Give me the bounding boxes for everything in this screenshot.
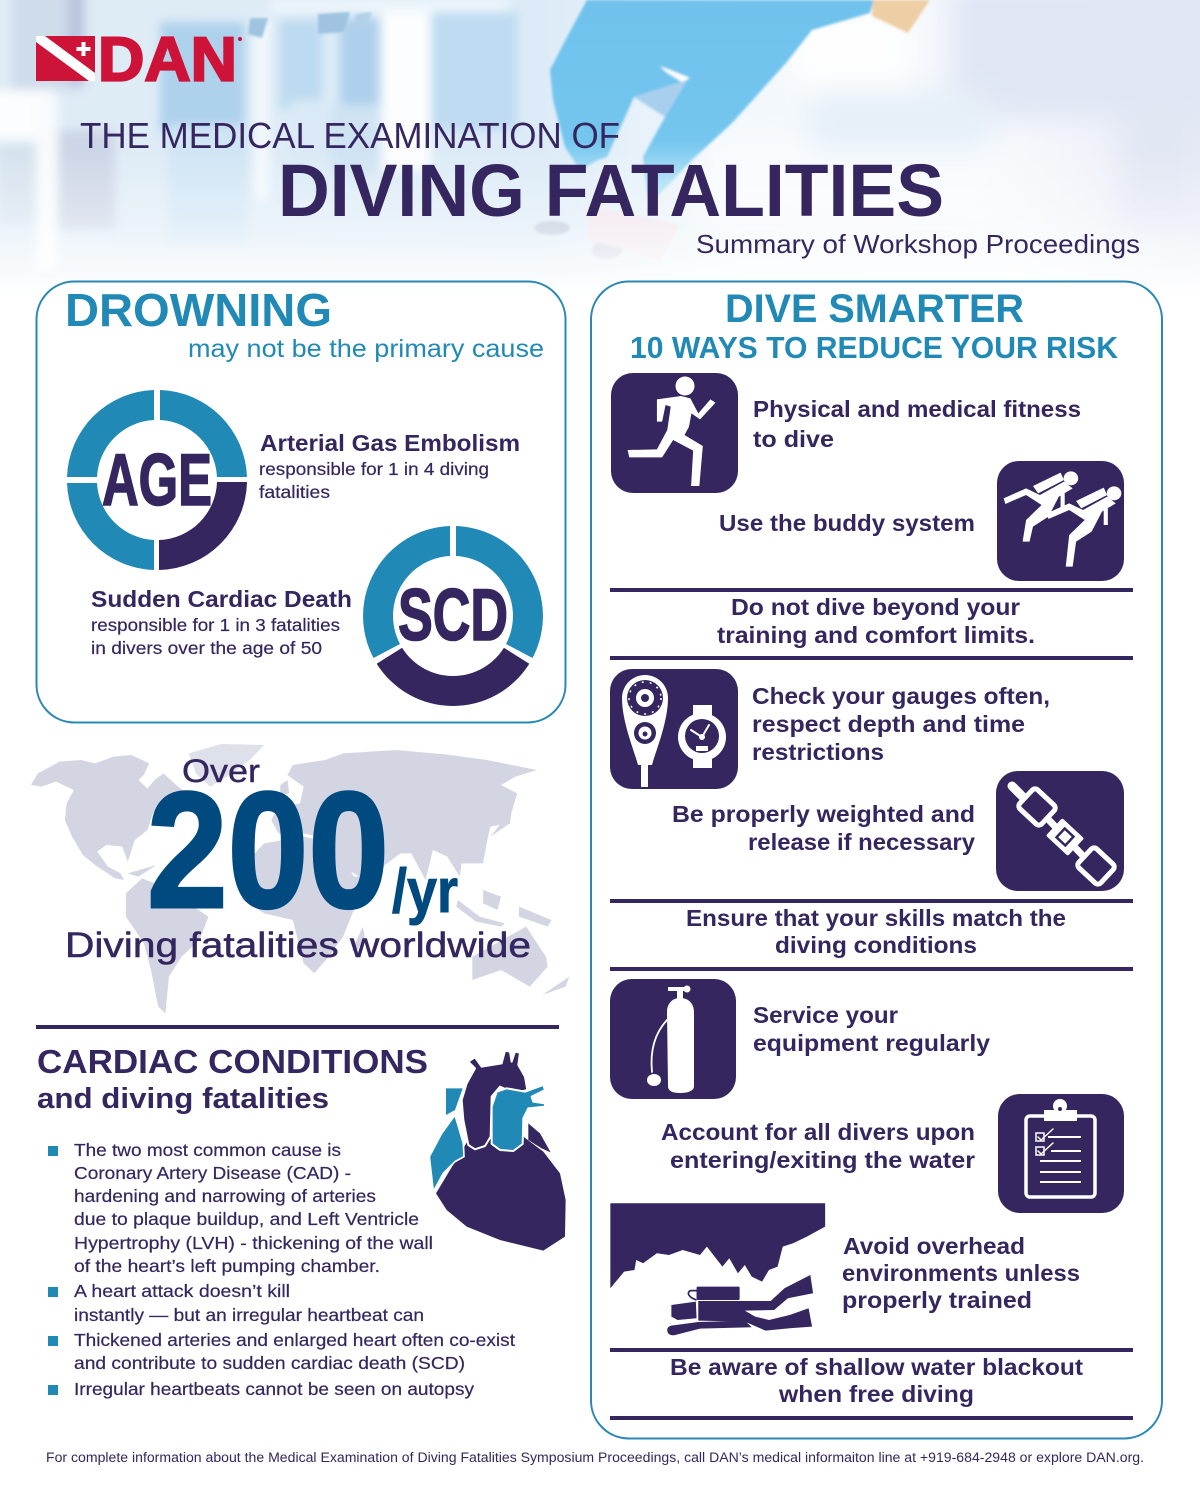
- text: fitness: to dive: [753, 426, 834, 452]
- icon: clipboard: [998, 1094, 1124, 1213]
- list: cardiac facts: hardening and narrowing of arteries: [74, 1186, 376, 1206]
- text: shallow water blackout: Be aware of shallow water blackout: [670, 1354, 1083, 1380]
- text: skills: Ensure that your skills match the: [686, 905, 1066, 931]
- icon: gauges: [610, 669, 738, 789]
- text: equipment: equipment regularly: [753, 1030, 990, 1056]
- text: equipment: [753, 1002, 990, 1056]
- text: equipment: Service your: [753, 1002, 898, 1028]
- title: [80, 115, 1140, 259]
- panel: dive smarter: [591, 282, 1162, 1438]
- heading: drowning: [65, 284, 544, 363]
- text: buddy system: Use the buddy system: [719, 510, 975, 536]
- statistic: over 200 per year: [65, 753, 531, 965]
- heading: dive smarter: DIVE SMARTER: [725, 287, 1024, 331]
- heading: cardiac conditions: CARDIAC CONDITIONS: [37, 1043, 428, 1080]
- text: account for divers: [661, 1119, 975, 1173]
- text: sudden cardiac death: in divers over the age of 50: [91, 638, 322, 658]
- icon: runner: [611, 373, 738, 493]
- heading: cardiac conditions: and diving fatalities: [37, 1083, 329, 1115]
- list: cardiac facts: instantly — but an irregular heartbeat can: [74, 1305, 424, 1325]
- text: fitness: [753, 396, 1081, 452]
- vials: [534, 205, 680, 260]
- world map: [31, 744, 569, 1013]
- text: gauges: restrictions: [752, 739, 884, 765]
- icon: cave diver: [610, 1203, 825, 1335]
- list: cardiac facts: The two most common cause is: [74, 1140, 341, 1160]
- heading: cardiac conditions: [37, 1043, 428, 1115]
- text: gauges: [752, 683, 1050, 765]
- text: skills: [686, 905, 1066, 958]
- icon: blue glove: [550, 0, 930, 200]
- icon: heart: [429, 1051, 566, 1251]
- text: fitness: Physical and medical fitness: [753, 396, 1081, 422]
- chart: SCD donut: SCD: [398, 575, 508, 656]
- text: training limits: training and comfort limits.: [717, 622, 1035, 648]
- text: overhead environments: properly trained: [842, 1287, 1032, 1313]
- title: Summary of Workshop Proceedings: [696, 229, 1140, 259]
- text: skills: diving conditions: [775, 932, 977, 958]
- list: cardiac facts: Hypertrophy (LVH) - thickening of the wall: [74, 1233, 433, 1253]
- icon: two divers: [997, 461, 1124, 581]
- text: weights: release if necessary: [748, 829, 975, 855]
- chart: SCD donut: [363, 526, 543, 706]
- logo: DAN: [36, 26, 242, 94]
- icon: scuba tank: [610, 979, 736, 1099]
- heading: drowning: DROWNING: [65, 284, 332, 336]
- text: arterial gas embolism: fatalities: [259, 482, 330, 502]
- chart: AGE donut: [67, 390, 247, 570]
- heading: drowning: may not be the primary cause: [188, 335, 544, 363]
- statistic: over 200 per year: 200: [147, 758, 389, 942]
- list: cardiac facts: A heart attack doesn’t kill: [74, 1281, 290, 1301]
- title: THE MEDICAL EXAMINATION OF: [80, 115, 620, 156]
- background: blurred laboratory photo: [0, 0, 1200, 300]
- logo: DAN: DAN: [98, 26, 237, 94]
- text: account for divers: entering/exiting the water: [670, 1147, 975, 1173]
- text: overhead environments: environments unless: [842, 1260, 1080, 1286]
- text: gauges: respect depth and time: [752, 711, 1025, 737]
- heading: dive smarter: 10 WAYS TO REDUCE YOUR RISK: [630, 330, 1119, 365]
- text: training limits: [717, 594, 1035, 648]
- text: shallow water blackout: [670, 1354, 1083, 1407]
- list: cardiac facts: Irregular heartbeats cannot be seen on autopsy: [74, 1379, 474, 1399]
- statistic: over 200 per year: Diving fatalities worldwide: [65, 926, 531, 965]
- text: sudden cardiac death: Sudden Cardiac Death: [91, 586, 352, 612]
- list: cardiac facts: due to plaque buildup, and Left Ventricle: [74, 1209, 419, 1229]
- title: DIVING FATALITIES: [278, 149, 944, 232]
- text: weights: Be properly weighted and: [672, 801, 975, 827]
- list: cardiac facts: of the heart’s left pumping chamber.: [74, 1256, 380, 1276]
- text: gauges: Check your gauges often,: [752, 683, 1050, 709]
- footer: For complete information about the Medical Examination of Diving Fatalities Symposium Proceedings, call DAN’s medical informaiton line at +919-684-2948 or explore DAN.org.: [46, 1450, 1144, 1465]
- heading: dive smarter: [630, 287, 1119, 365]
- list: cardiac facts: Thickened arteries and enlarged heart often co-exist: [74, 1330, 515, 1350]
- text: weights: [672, 801, 975, 855]
- text: arterial gas embolism: [259, 430, 520, 502]
- text: arterial gas embolism: Arterial Gas Embolism: [260, 430, 520, 456]
- list: cardiac facts: [48, 1140, 515, 1399]
- text: account for divers: Account for all divers upon: [661, 1119, 975, 1145]
- list: cardiac facts: Coronary Artery Disease (CAD) -: [74, 1163, 351, 1183]
- text: shallow water blackout: when free diving: [778, 1381, 974, 1407]
- icon: weight belt: [996, 771, 1124, 891]
- text: training limits: Do not dive beyond your: [731, 594, 1020, 620]
- text: sudden cardiac death: responsible for 1 in 3 fatalities: [91, 615, 340, 635]
- panel: drowning: [36, 282, 566, 722]
- statistic: over 200 per year: Over: [182, 753, 260, 789]
- statistic: over 200 per year: /yr: [392, 857, 458, 926]
- text: overhead environments: Avoid overhead: [843, 1233, 1025, 1259]
- text: sudden cardiac death: [91, 586, 352, 658]
- chart: AGE donut: AGE: [102, 440, 212, 521]
- text: overhead environments: [842, 1233, 1080, 1313]
- text: arterial gas embolism: responsible for 1 in 4 diving: [259, 459, 489, 479]
- list: cardiac facts: and contribute to sudden cardiac death (SCD): [74, 1353, 465, 1373]
